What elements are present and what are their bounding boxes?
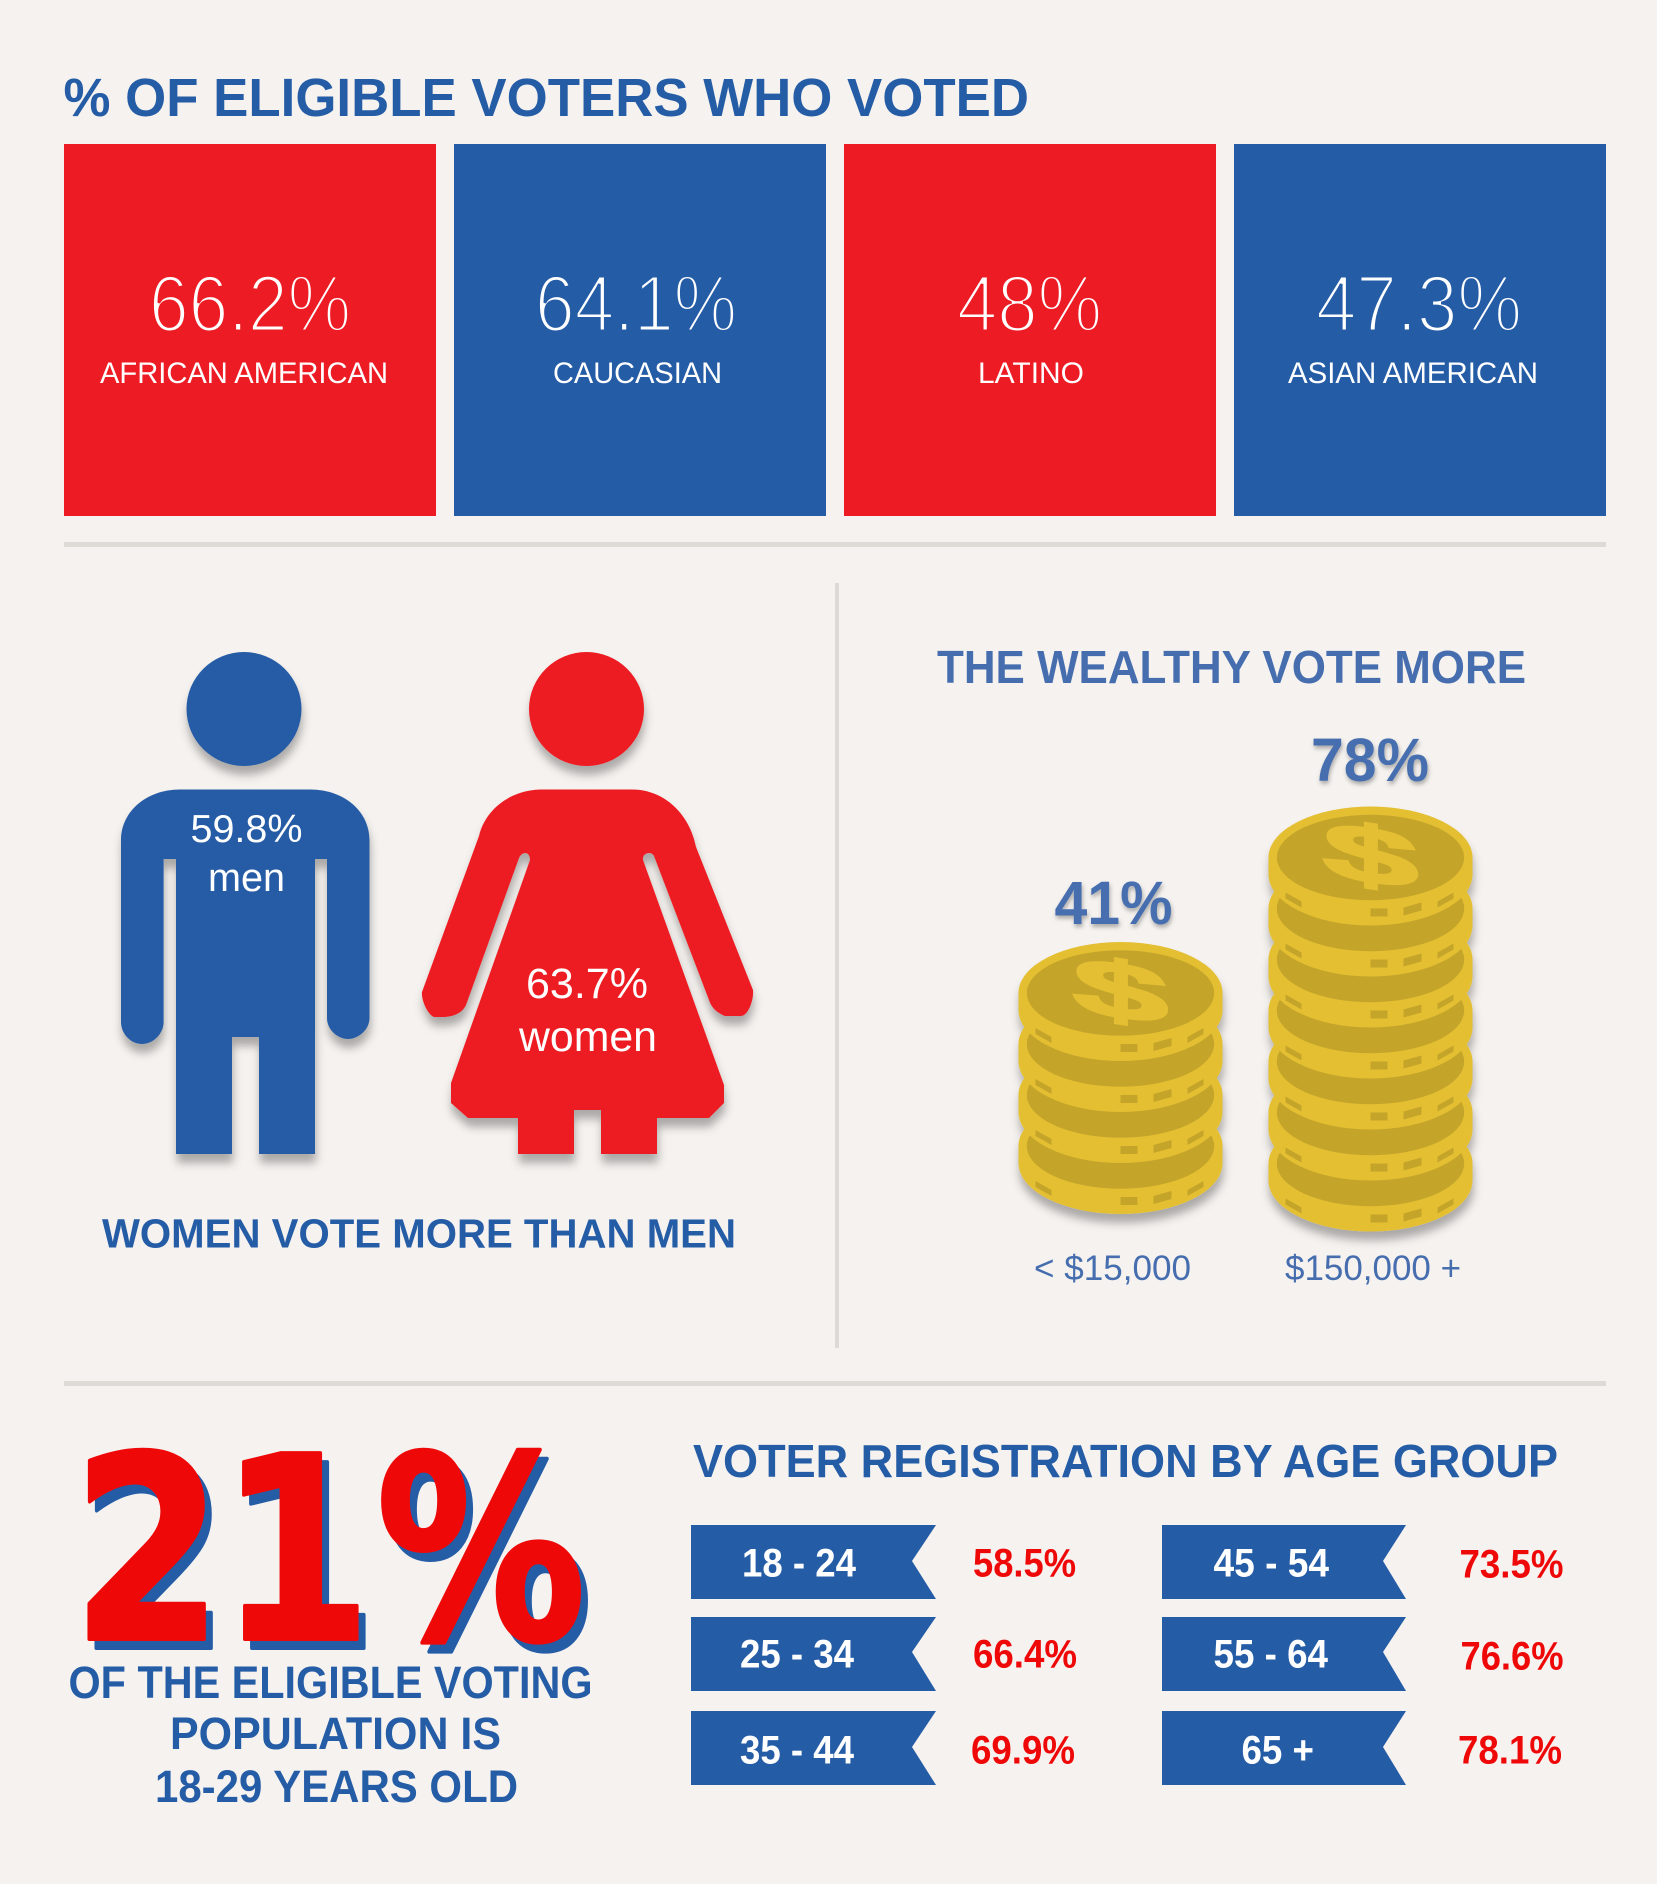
panel: Caucasian: 64.1% xyxy=(535,259,737,348)
women percentage xyxy=(518,960,657,1061)
women percentage: 63.7% xyxy=(526,960,648,1008)
ribbon: 35-44: 35 - 44 xyxy=(740,1728,855,1772)
big stat: 21%: 2 xyxy=(79,1412,230,1709)
panel: Latino xyxy=(844,144,1216,516)
ribbon: 25-34: 25 - 34 xyxy=(740,1632,855,1676)
text: eligible voting population: 18-29 YEARS OLD xyxy=(155,1761,518,1812)
men percentage: 59.8% xyxy=(190,808,302,851)
ribbon: 65+ xyxy=(1162,1711,1406,1785)
big stat: 21%: % xyxy=(383,1412,593,1709)
heading: voter registration: VOTER REGISTRATION BY AGE GROUP xyxy=(693,1435,1558,1487)
label: over 150000: $150,000 + xyxy=(1285,1249,1461,1288)
panel: African American xyxy=(64,144,436,516)
heading: wealthy vote more: THE WEALTHY VOTE MORE xyxy=(937,641,1526,693)
label: under 15000: < $15,000 xyxy=(1034,1249,1191,1288)
panel: African American: AFRICAN AMERICAN xyxy=(100,357,388,390)
value: 76.6%: 76.6% xyxy=(1460,1634,1564,1678)
panel: Asian American: ASIAN AMERICAN xyxy=(1288,357,1538,390)
stat: 41%: 41% xyxy=(1054,869,1172,937)
panel: Asian American: 47.3% xyxy=(1316,259,1522,348)
icon: woman figure xyxy=(422,652,753,1154)
icon: small coin stack xyxy=(1018,939,1222,1214)
ribbon: 25-34 xyxy=(691,1617,936,1691)
ribbon: 45-54 xyxy=(1162,1525,1406,1599)
icon: large coin stack xyxy=(1268,803,1472,1232)
value: 66.4%: 66.4% xyxy=(973,1632,1077,1676)
panel: Asian American xyxy=(1234,144,1606,516)
value: 69.9%: 69.9% xyxy=(971,1728,1075,1772)
title: % OF ELIGIBLE VOTERS WHO VOTED xyxy=(64,68,1029,128)
stat: 78%: 78% xyxy=(1311,726,1429,794)
ribbon: 18-24 xyxy=(691,1525,936,1599)
icon: man figure xyxy=(121,652,370,1154)
dollar sign large: $ xyxy=(1323,803,1418,907)
big stat: 21%: 1 xyxy=(226,1412,379,1709)
ribbon: 18-24: 18 - 24 xyxy=(742,1542,857,1586)
men percentage xyxy=(190,808,302,900)
panel: Latino: 48% xyxy=(957,259,1102,348)
women percentage: women xyxy=(518,1013,657,1061)
big stat: 21%: 2 xyxy=(72,1403,223,1700)
men percentage: men xyxy=(208,856,285,900)
ribbon: 55-64 xyxy=(1162,1617,1406,1691)
big stat: 21%: % xyxy=(376,1403,586,1700)
value: 58.5%: 58.5% xyxy=(973,1542,1076,1586)
panel: Caucasian xyxy=(454,144,826,516)
value: 78.1%: 78.1% xyxy=(1458,1728,1562,1772)
ribbon: 65+: 65 + xyxy=(1242,1728,1314,1772)
text: eligible voting population xyxy=(68,1657,592,1812)
caption: women vote more: WOMEN VOTE MORE THAN MEN xyxy=(102,1210,736,1256)
text: eligible voting population: POPULATION IS xyxy=(170,1708,501,1759)
ribbon: 35-44 xyxy=(691,1711,936,1785)
text: eligible voting population: OF THE ELIGIBLE VOTING xyxy=(68,1657,592,1708)
big stat: 21%: 1 xyxy=(219,1403,372,1700)
big stat: 21% xyxy=(72,1403,593,1709)
ribbon: 45-54: 45 - 54 xyxy=(1214,1542,1330,1586)
panel: Caucasian: CAUCASIAN xyxy=(553,357,722,390)
ribbon: 55-64: 55 - 64 xyxy=(1214,1632,1329,1676)
panel: African American: 66.2% xyxy=(149,259,351,348)
dollar sign small: $ xyxy=(1073,939,1168,1043)
panel: Latino: LATINO xyxy=(978,357,1084,390)
value: 73.5%: 73.5% xyxy=(1460,1542,1564,1586)
